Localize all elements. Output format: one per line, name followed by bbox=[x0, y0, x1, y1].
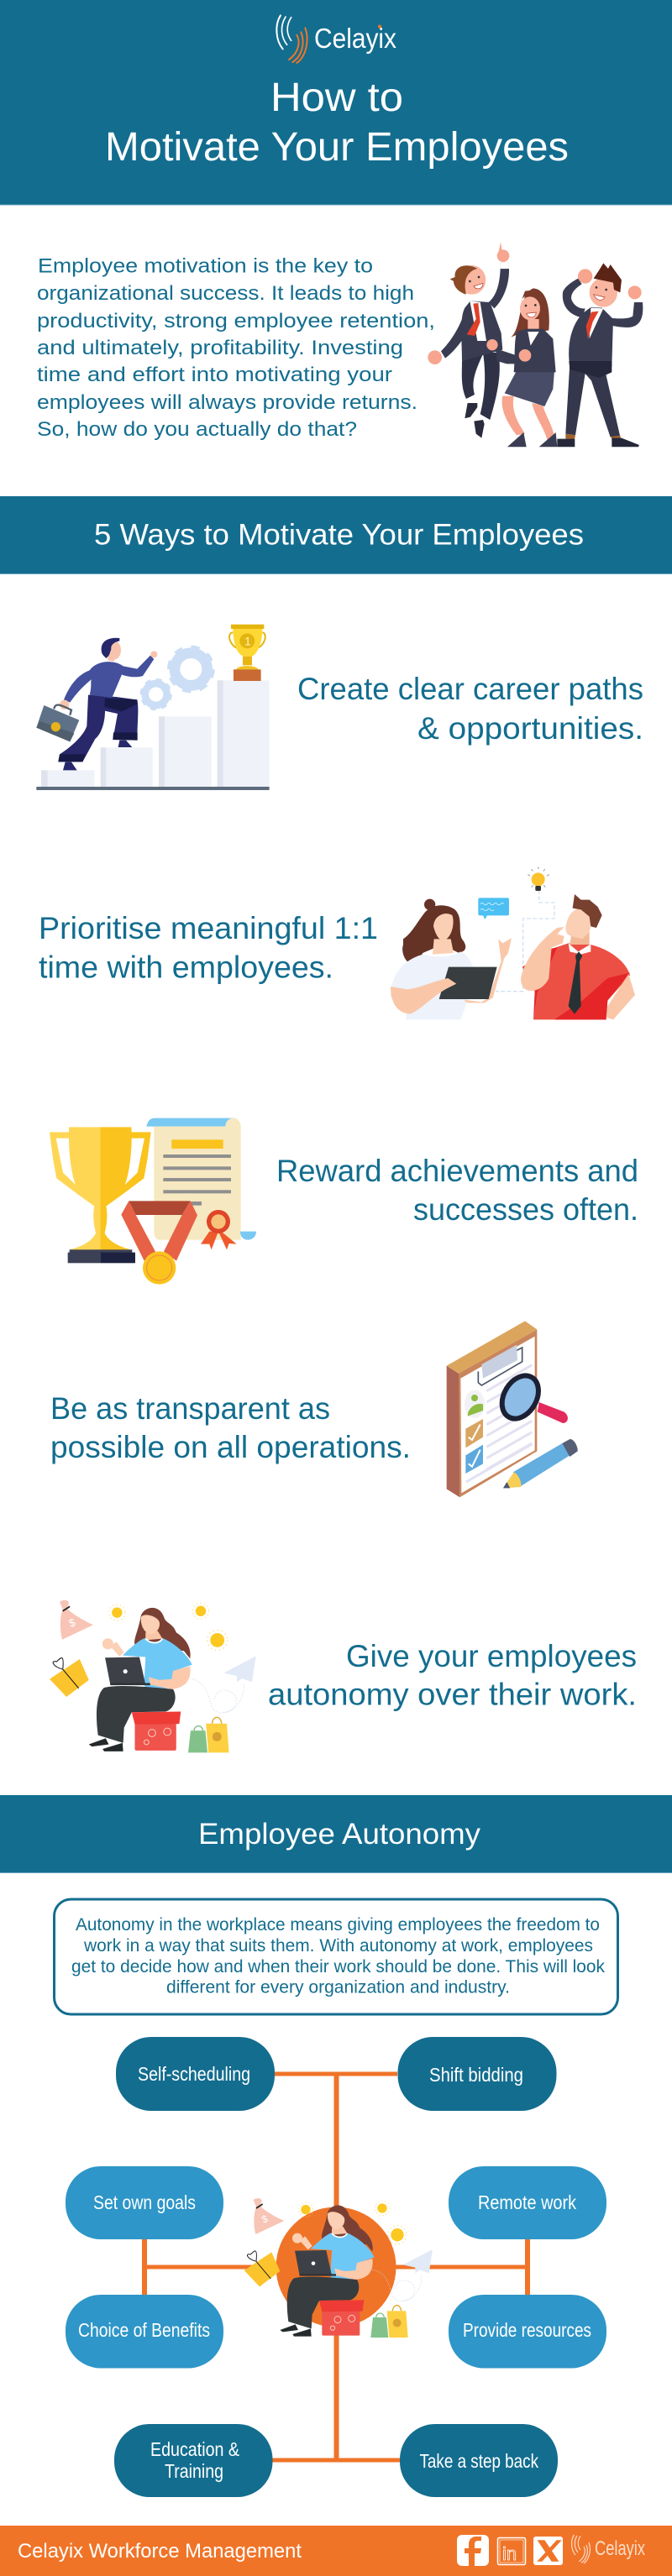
illustration: three cheering employees bbox=[428, 242, 643, 447]
orange centre circle bbox=[276, 2207, 396, 2327]
pill: choice of benefits bbox=[66, 2295, 223, 2368]
intro paragraph: Employee motivation is the key to bbox=[38, 255, 373, 277]
way 1 illustration: climbing steps to trophy bbox=[36, 625, 270, 790]
pill: remote work: Remote work bbox=[478, 2191, 576, 2213]
way 4 illustration: clipboard, magnifier and pencil bbox=[447, 1321, 578, 1497]
autonomy definition box bbox=[54, 1899, 618, 2014]
icon: linkedin bbox=[497, 2537, 526, 2564]
intro paragraph: productivity, strong employee retention, bbox=[37, 310, 435, 332]
woman with tablet bbox=[424, 899, 435, 910]
pill: provide resources: Provide resources bbox=[463, 2319, 591, 2341]
autonomy definition box: different for every organization and industry. bbox=[166, 1978, 510, 1997]
intro paragraph: time and effort into motivating your bbox=[37, 364, 392, 386]
speech bubble bbox=[478, 898, 509, 915]
way 5 text: autonomy over their work. bbox=[268, 1678, 637, 1711]
way 4 text: Be as transparent as bbox=[50, 1391, 330, 1426]
man in red bbox=[522, 943, 630, 1019]
autonomy definition box: Autonomy in the workplace means giving employees the freedom to bbox=[76, 1915, 600, 1935]
pill: education and training: Training bbox=[165, 2460, 223, 2482]
way 2 illustration: one-to-one conversation bbox=[391, 867, 635, 1019]
way 5 illustration: woman with laptop on gift box: $ bbox=[67, 1615, 77, 1630]
footer logo: Celayix bbox=[595, 2537, 645, 2560]
intro paragraph: employees will always provide returns. bbox=[37, 391, 417, 414]
man with briefcase bbox=[63, 762, 77, 770]
pill: remote work bbox=[449, 2166, 606, 2239]
way 2 text bbox=[39, 911, 378, 984]
woman bbox=[511, 288, 549, 338]
bulb bbox=[532, 872, 545, 886]
autonomy definition box: get to decide how and when their work should be done. This will look bbox=[71, 1957, 605, 1977]
gears bbox=[175, 653, 207, 685]
intro paragraph: and ultimately, profitability. Investing bbox=[37, 337, 403, 359]
title bbox=[105, 76, 569, 170]
way 2 text: time with employees. bbox=[39, 950, 333, 984]
pill: set own goals: Set own goals bbox=[93, 2191, 196, 2213]
pill: education and training bbox=[114, 2424, 272, 2497]
pill: self-scheduling: Self-scheduling bbox=[138, 2063, 250, 2085]
certificate bbox=[146, 1118, 235, 1127]
man 1 bbox=[489, 269, 509, 308]
title: Motivate Your Employees bbox=[105, 125, 569, 170]
intro paragraph: organizational success. It leads to high bbox=[37, 282, 414, 305]
footer bbox=[0, 2526, 672, 2576]
centre illustration: woman with laptop on gift box: $ bbox=[260, 2212, 270, 2226]
way 1 text bbox=[297, 672, 643, 746]
icon: linkedin: in bbox=[502, 2543, 517, 2564]
way 4 text: possible on all operations. bbox=[50, 1430, 411, 1464]
way 1 illustration: climbing steps to trophy: 1 bbox=[244, 634, 251, 647]
trophy bbox=[229, 632, 265, 648]
footer text: Celayix Workforce Management bbox=[18, 2540, 302, 2563]
header banner bbox=[0, 0, 672, 205]
icon: X bbox=[533, 2537, 563, 2565]
section bar: employee autonomy bbox=[0, 1795, 672, 1873]
way 5 illustration: woman with laptop on gift box bbox=[50, 1600, 256, 1752]
title: How to bbox=[270, 76, 403, 120]
section bar: 5 ways bbox=[0, 496, 672, 574]
way 3 text: successes often. bbox=[413, 1192, 638, 1227]
pill: education and training: Education & bbox=[150, 2438, 239, 2460]
pill: take a step back bbox=[400, 2424, 558, 2497]
section bar: employee autonomy: Employee Autonomy bbox=[198, 1818, 481, 1851]
centre illustration: woman with laptop on gift box bbox=[244, 2198, 433, 2338]
seal bbox=[201, 1232, 218, 1249]
way 2 text: Prioritise meaningful 1:1 bbox=[39, 911, 378, 945]
way 4 text bbox=[50, 1391, 411, 1464]
medal bbox=[129, 1201, 191, 1215]
pill: provide resources bbox=[449, 2295, 606, 2368]
way 1 text: Create clear career paths bbox=[297, 672, 643, 706]
footer logo bbox=[572, 2535, 645, 2563]
way 3 text bbox=[276, 1154, 638, 1227]
way 3 illustration: trophy, medal and certificate bbox=[50, 1118, 256, 1285]
pill: take a step back: Take a step back bbox=[420, 2450, 538, 2472]
autonomy definition box: work in a way that suits them. With autonomy at work, employees bbox=[83, 1936, 593, 1956]
section bar: 5 ways: 5 Ways to Motivate Your Employees bbox=[94, 519, 584, 551]
intro paragraph: So, how do you actually do that? bbox=[37, 418, 357, 441]
pill: shift bidding bbox=[398, 2037, 556, 2111]
logo: Celayix: Celayix bbox=[314, 23, 396, 54]
trophy bbox=[50, 1127, 100, 1250]
intro paragraph bbox=[37, 255, 435, 441]
logo: Celayix bbox=[276, 15, 396, 63]
pill: set own goals bbox=[66, 2166, 223, 2239]
pill: shift bidding: Shift bidding bbox=[429, 2064, 523, 2086]
pill: self-scheduling bbox=[116, 2037, 275, 2111]
pill: choice of benefits: Choice of Benefits bbox=[78, 2319, 210, 2341]
icon: facebook bbox=[457, 2535, 489, 2566]
connector lines bbox=[142, 2072, 530, 2462]
man 3 bbox=[563, 279, 585, 317]
way 5 text: Give your employees bbox=[346, 1639, 637, 1673]
way 5 text bbox=[268, 1639, 637, 1711]
way 1 text: & opportunities. bbox=[417, 711, 643, 746]
way 3 text: Reward achievements and bbox=[276, 1154, 638, 1188]
